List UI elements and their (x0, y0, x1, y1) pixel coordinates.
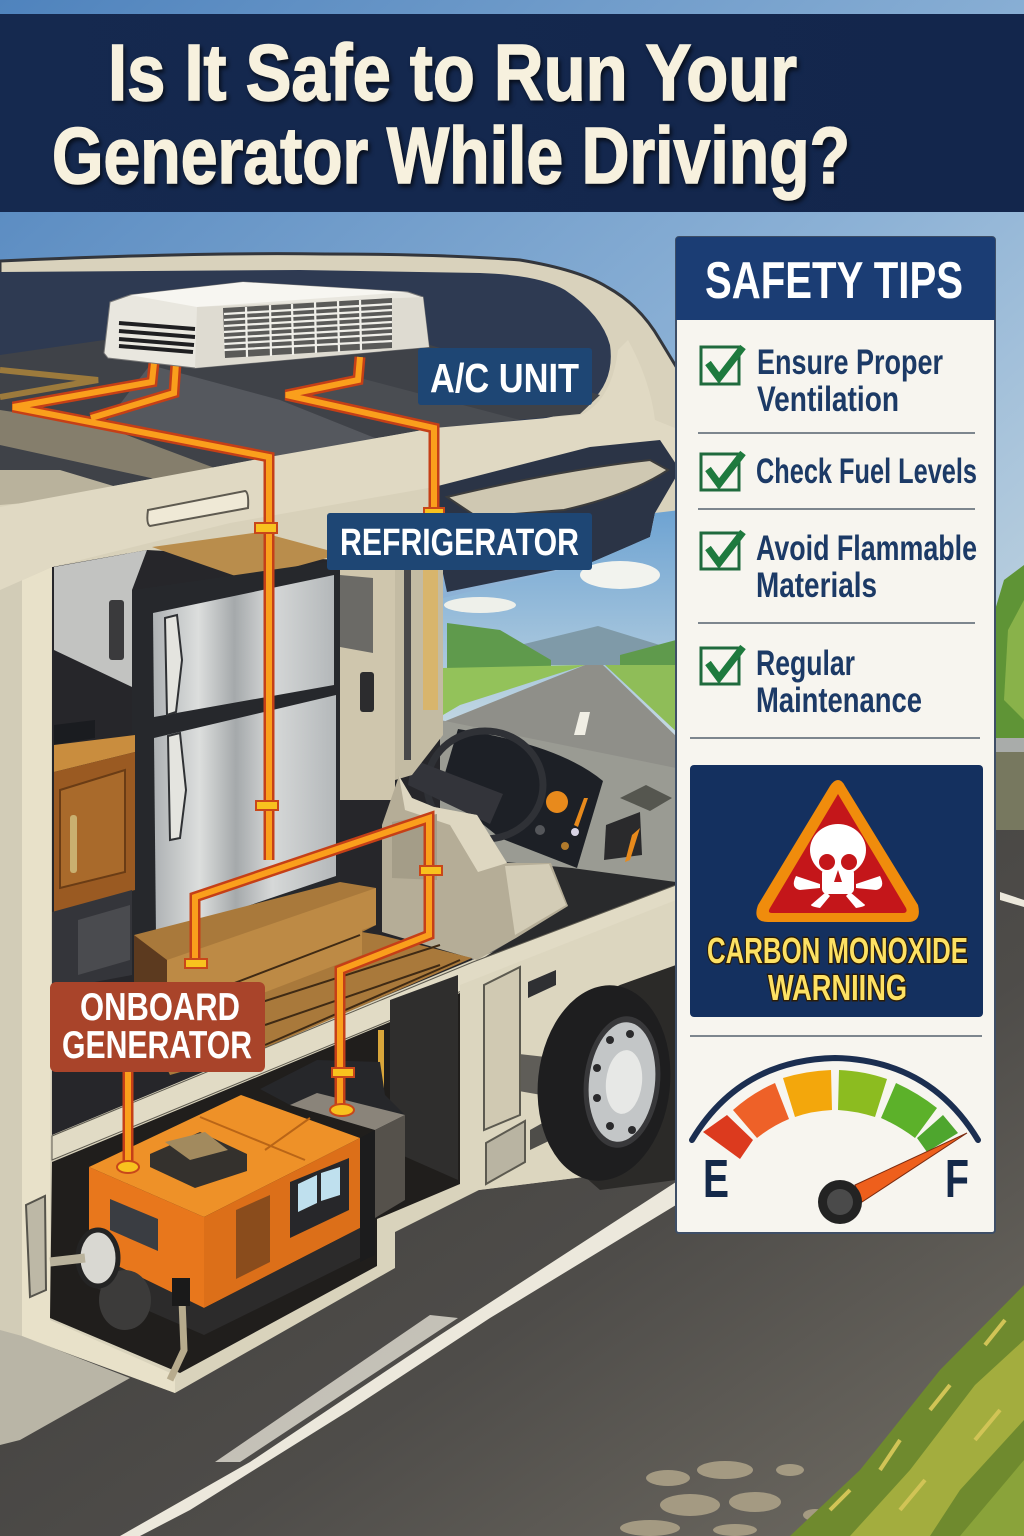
A/C grille (223, 298, 392, 358)
pipe clamps (117, 508, 444, 1173)
gauge E: E (703, 1149, 729, 1209)
generator grille (236, 1195, 270, 1279)
cream floor band (52, 885, 676, 1160)
warning triangle (756, 780, 919, 922)
generator control panel (290, 1158, 349, 1238)
lower body side (0, 880, 680, 1393)
generator (50, 1095, 360, 1380)
fridge upper door (153, 575, 334, 717)
window view (443, 510, 680, 800)
gauge needle (855, 1133, 967, 1202)
label: onboard generator: ONBOARD (80, 986, 240, 1029)
gauge hub (818, 1180, 862, 1224)
title banner (0, 14, 1024, 212)
lower compartment (50, 993, 460, 1373)
door handle (528, 970, 556, 998)
cab visor (447, 460, 668, 517)
tip: ventilation (701, 343, 943, 419)
left wall (0, 500, 60, 1340)
generator pulley (78, 1230, 118, 1286)
title: Is It Safe to Run Your (108, 28, 797, 117)
tip: ventilation: Ventilation (757, 380, 899, 419)
carbon monoxide warning (690, 765, 983, 1017)
generator outlet (172, 1278, 190, 1306)
warning text: WARNIING (768, 967, 907, 1008)
panel: safety tips (676, 237, 995, 1233)
title: Generator While Driving? (52, 111, 850, 200)
body shadow band (484, 1050, 590, 1100)
road surface (0, 830, 1024, 1536)
tip: fuel levels (701, 452, 977, 491)
seat (382, 776, 568, 960)
generator outlet pipe (50, 1258, 85, 1262)
generator left vent (110, 1199, 158, 1251)
skull (794, 824, 882, 908)
tip: ventilation: Ensure Proper (757, 343, 943, 382)
tip: maintenance: Regular (756, 644, 855, 683)
compartment yellow pipe (378, 1030, 384, 1120)
body vent (530, 1116, 555, 1150)
wheel arch (559, 965, 676, 1190)
tip: flammable materials: Materials (756, 566, 877, 605)
background: roadside trees (990, 565, 1024, 835)
generator engine (150, 1132, 247, 1188)
cab side body (460, 900, 676, 1190)
side lower hatch (486, 1121, 525, 1184)
cab dark band (434, 440, 680, 592)
fridge upper handle (165, 615, 182, 715)
kitchen cabinet (52, 720, 135, 990)
title (52, 28, 850, 200)
label: refrigerator: REFRIGERATOR (340, 522, 579, 564)
freezer latch (109, 600, 124, 660)
roof outer shell (0, 254, 680, 530)
tip: flammable materials (701, 529, 977, 605)
road cobbles (620, 1461, 827, 1536)
wood storage box (134, 882, 472, 1075)
roadside grass (790, 1285, 1024, 1536)
compartment back panel (390, 975, 458, 1180)
background: sky (0, 0, 1024, 900)
wiring pipes (0, 357, 434, 1165)
fuel gauge (692, 1058, 978, 1224)
label: A/C unit: A/C UNIT (430, 355, 579, 401)
cream wall below ledge (0, 470, 442, 590)
panel header (676, 237, 995, 320)
label: onboard generator: GENERATOR (62, 1024, 252, 1067)
counter shelf wood (152, 532, 327, 580)
warning text (707, 930, 968, 1008)
left lower skirt (0, 1330, 130, 1445)
A/C unit (104, 282, 429, 368)
freezer box (54, 550, 147, 687)
road edge markings (120, 892, 1024, 1536)
wheel (528, 979, 680, 1187)
tip: maintenance: Maintenance (756, 681, 922, 720)
roof floor panels (0, 340, 600, 507)
generator screen right (321, 1167, 340, 1201)
label: refrigerator (327, 513, 592, 570)
background: guard rail (990, 738, 1024, 752)
A/C side vents (119, 323, 195, 352)
gauge F: F (945, 1149, 969, 1209)
pillar (340, 520, 443, 800)
roof front ledge (0, 340, 680, 590)
generator exhaust (170, 1300, 184, 1380)
label: onboard generator (50, 982, 265, 1072)
generator rear box (260, 1060, 405, 1262)
upper interior dark (52, 540, 472, 1135)
tip: maintenance (701, 644, 922, 720)
roof cavity (0, 270, 611, 507)
generator lower wheel (99, 1270, 151, 1330)
dashboard (427, 720, 676, 962)
rear door handle (26, 1196, 46, 1297)
cab console (408, 759, 503, 824)
left door jamb (22, 560, 175, 1393)
wall slot vent (147, 491, 248, 526)
side door (484, 967, 520, 1130)
fridge lower door (154, 695, 336, 937)
motorhome illustration (0, 254, 680, 1445)
generator screen left (298, 1175, 317, 1212)
fridge lower handle (168, 733, 186, 840)
A/C grille slats (224, 300, 392, 357)
fridge frame (132, 560, 340, 945)
